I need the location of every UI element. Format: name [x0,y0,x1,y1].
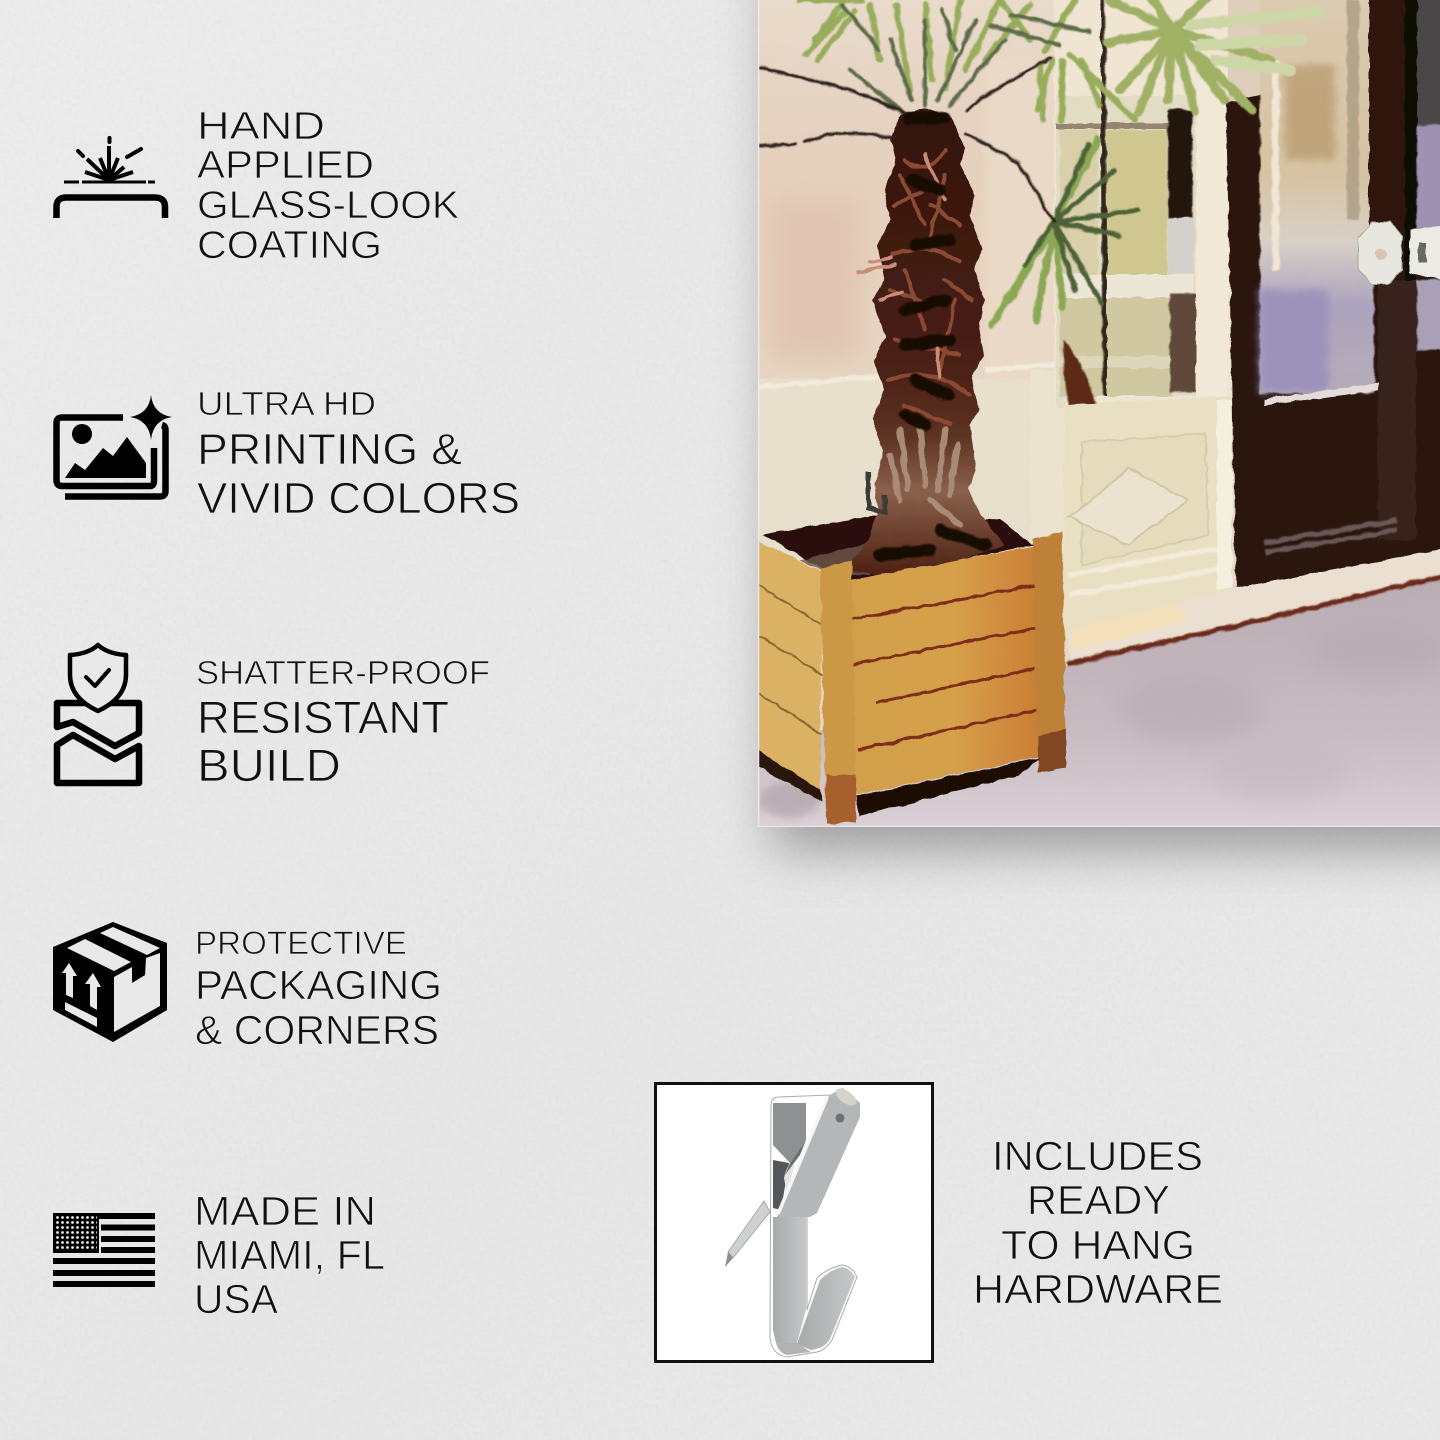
heading: includes ready to hang hardware [973,1133,1223,1312]
heading: hand applied glass-look coating: GLASS-LOOK [197,184,459,227]
heading: ultra hd printing and vivid colors: ULTRA HD [197,385,376,422]
heading: hand applied glass-look coating: APPLIED [197,144,374,187]
heading: protective packaging and corners: PROTECTIVE [195,925,407,961]
icon: ultra hd image [56,395,172,496]
painting sidewalk [750,578,1440,835]
painting door ornaments [1358,222,1440,284]
heading: made in miami: USA [194,1276,279,1322]
panel: wall art painting of palm in planter [740,0,1440,835]
painting wall [740,0,1080,568]
heading: shatter-proof resistant build: BUILD [197,740,341,791]
heading: ultra hd printing and vivid colors [197,385,520,523]
heading: includes ready to hang hardware: HARDWARE [973,1266,1223,1312]
heading: made in miami: MIAMI, FL [194,1232,385,1278]
heading: protective packaging and corners: & CORNERS [195,1007,439,1053]
heading: shatter-proof resistant build: RESISTANT [197,692,449,743]
icon: glass coating [56,138,165,218]
panel: hanging hardware photo [656,1084,932,1362]
icon: packaging box [53,922,167,1042]
heading: made in miami [194,1188,385,1322]
heading: protective packaging and corners [195,925,442,1053]
painting lower door panel [1064,396,1232,640]
hook body [770,1095,857,1357]
painting wooden planter soil [762,514,1033,582]
painting doorstep [1066,548,1440,664]
painting palm fronds [759,0,1320,325]
painting shop door [1226,0,1440,588]
heading: shatter-proof resistant build [196,654,490,791]
heading: hand applied glass-look coating: HAND [197,105,325,148]
icon: american flag [53,1213,155,1287]
heading: shatter-proof resistant build: SHATTER-PROOF [196,654,490,691]
painting wooden planter [750,532,1066,824]
heading: ultra hd printing and vivid colors: VIVID COLORS [197,474,520,523]
heading: includes ready to hang hardware: READY [1027,1177,1170,1223]
heading: hand applied glass-look coating: COATING [197,224,382,267]
hook nail [725,1201,770,1267]
heading: includes ready to hang hardware: TO HANG [1001,1222,1195,1268]
heading: includes ready to hang hardware: INCLUDES [992,1133,1203,1179]
heading: ultra hd printing and vivid colors: PRINTING & [197,425,462,474]
hook front plate [777,1085,860,1217]
icon: shatter-proof shield [57,645,139,783]
heading: hand applied glass-look coating [197,105,459,267]
painting window [1054,0,1234,410]
heading: made in miami: MADE IN [194,1188,376,1234]
heading: protective packaging and corners: PACKAGING [195,962,442,1008]
painting palm trunk [845,108,1005,575]
